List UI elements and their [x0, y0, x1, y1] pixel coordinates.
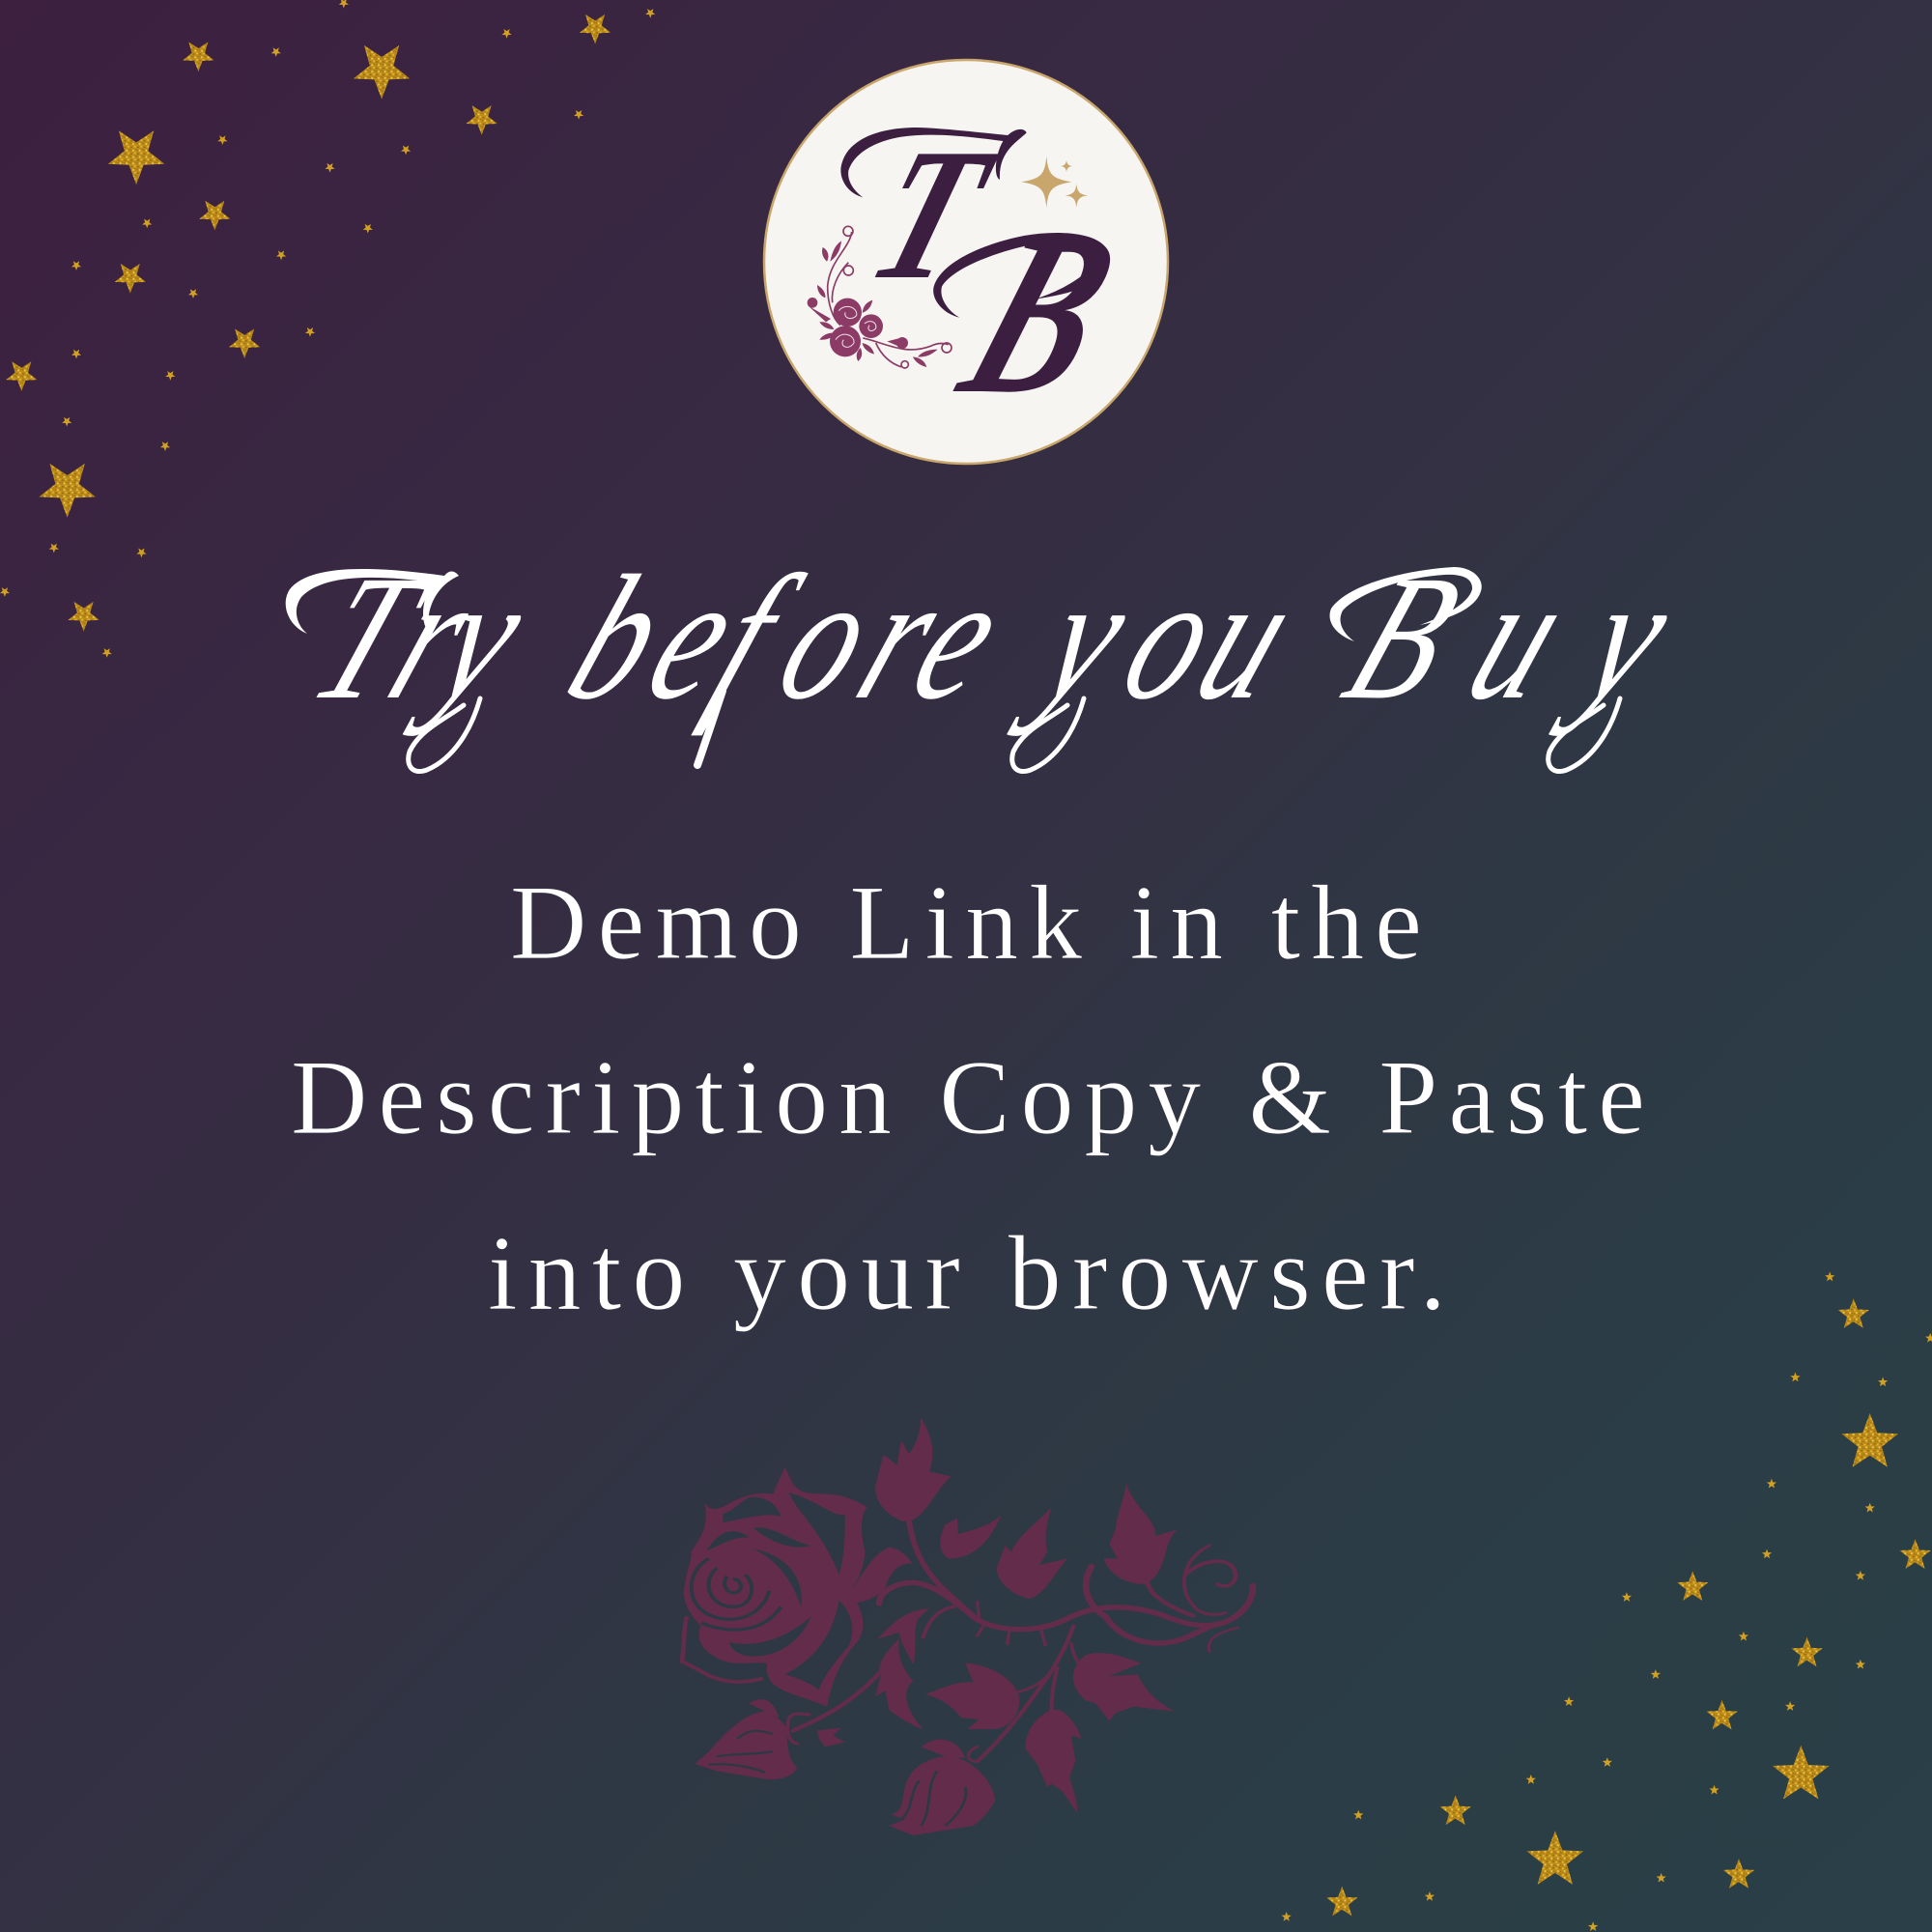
title descender tails: [409, 691, 1620, 772]
title: [286, 539, 1699, 772]
title text: Try before you Buy: [289, 539, 1699, 737]
line 2: Description Copy & Paste: [291, 1038, 1645, 1156]
monogram flourishes: [840, 128, 1108, 318]
gold stars: bottom-right cluster: [1282, 1272, 1932, 1931]
small rose wreath: [808, 226, 952, 368]
rose buds: [695, 1699, 995, 1835]
monogram letter T: T: [849, 111, 1014, 319]
line 3: into your browser.: [488, 1214, 1446, 1332]
title flourishes: [286, 567, 1482, 641]
logo badge: [764, 60, 1168, 464]
leaves: [817, 1417, 1178, 1813]
line 1: Demo Link in the: [510, 864, 1422, 981]
logo circle: [764, 60, 1168, 464]
stems and thorns: [787, 1504, 1253, 1761]
rose head: [682, 1467, 867, 1707]
rose silhouette: [682, 1417, 1253, 1835]
monogram letter B: B: [933, 185, 1146, 441]
gold stars: top-left cluster: [0, 0, 655, 658]
sparkles: [1021, 156, 1088, 208]
body text: [291, 864, 1645, 1332]
